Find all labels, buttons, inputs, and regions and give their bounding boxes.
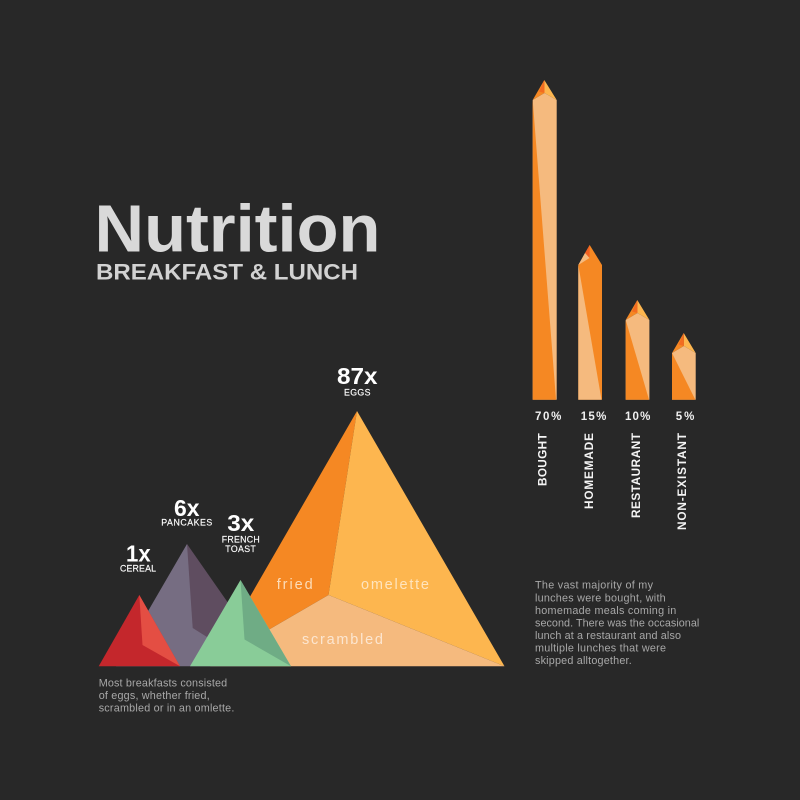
breakfast caption: scrambled or in an omlette. bbox=[99, 703, 234, 715]
percentages: 10% bbox=[625, 411, 650, 423]
label: scrambled: scrambled bbox=[302, 632, 383, 648]
lunch paragraph: lunch at a restaurant and also bbox=[535, 630, 681, 642]
triangle chart: eggs bbox=[210, 411, 504, 666]
triangle: french toast bbox=[190, 580, 291, 666]
stat: 3x french toast: 3x bbox=[227, 510, 255, 536]
percentages bbox=[535, 411, 694, 423]
bar tip bbox=[578, 245, 602, 265]
percentages: 70% bbox=[535, 411, 561, 423]
subtitle: BREAKFAST & LUNCH bbox=[96, 259, 358, 284]
lunch paragraph: The vast majority of my bbox=[535, 580, 654, 592]
vertical bar labels bbox=[535, 432, 689, 530]
stat: 3x french toast bbox=[222, 510, 260, 554]
bar: restaurant 10% bbox=[626, 300, 649, 400]
stat: 3x french toast: FRENCH bbox=[222, 534, 260, 544]
stat: 1x cereal: 1x bbox=[126, 540, 151, 566]
vertical bar labels: BOUGHT bbox=[535, 433, 549, 486]
bar tip bbox=[533, 80, 557, 100]
bar: homemade 15% bbox=[578, 245, 602, 400]
percentages: 15% bbox=[581, 411, 606, 423]
stat: 1x cereal: CEREAL bbox=[120, 564, 156, 574]
stat: 6x pancakes: 6x bbox=[174, 495, 200, 521]
title: Nutrition bbox=[94, 192, 381, 266]
vertical bar labels: HOMEMADE bbox=[582, 433, 596, 509]
lunch paragraph: homemade meals coming in bbox=[535, 605, 676, 617]
stat: 87x eggs: 87x bbox=[337, 363, 378, 389]
lunch paragraph: second. There was the occasional bbox=[535, 617, 699, 629]
triangle: pancakes bbox=[116, 544, 258, 666]
vertical bar labels: NON-EXISTANT bbox=[675, 432, 689, 530]
percentages: 5% bbox=[676, 411, 694, 423]
stat: 3x french toast: TOAST bbox=[225, 544, 256, 554]
lunch paragraph bbox=[535, 580, 699, 667]
label: fried: fried bbox=[277, 577, 313, 593]
triangle: cereal bbox=[99, 595, 180, 666]
bar tip bbox=[672, 333, 696, 353]
lunch paragraph: lunches were bought, with bbox=[535, 592, 666, 604]
lunch paragraph: multiple lunches that were bbox=[535, 642, 666, 654]
stat: 87x eggs: EGGS bbox=[344, 388, 371, 398]
lunch paragraph: skipped alltogether. bbox=[535, 655, 632, 667]
vertical bar labels: RESTAURANT bbox=[629, 432, 643, 518]
bar: non-existant 5% bbox=[672, 333, 696, 400]
bar: bought 70% bbox=[533, 80, 557, 400]
stat: 1x cereal bbox=[120, 540, 156, 574]
breakfast caption bbox=[99, 678, 234, 715]
breakfast caption: of eggs, whether fried, bbox=[99, 690, 210, 702]
bar tip bbox=[626, 300, 649, 320]
stat: 6x pancakes bbox=[161, 495, 212, 528]
label: omelette: omelette bbox=[361, 577, 429, 593]
breakfast caption: Most breakfasts consisted bbox=[99, 678, 227, 690]
stat: 6x pancakes: PANCAKES bbox=[161, 518, 212, 528]
